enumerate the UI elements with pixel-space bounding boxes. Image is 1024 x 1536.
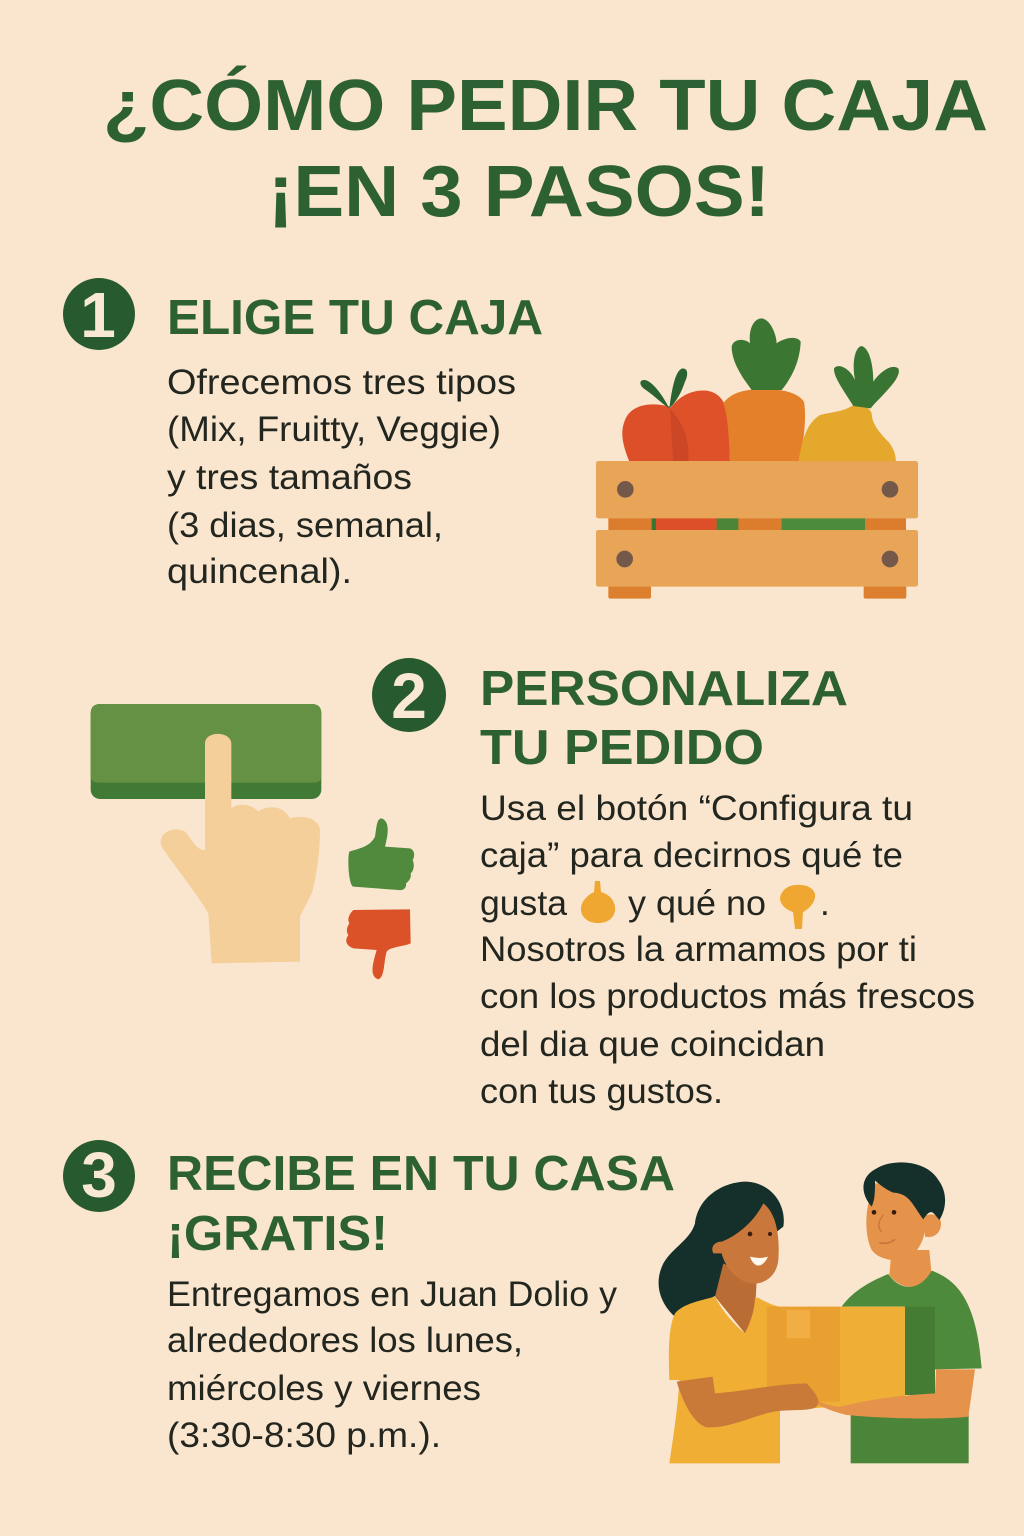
step 2 text: con los productos más frescos: [480, 977, 975, 1016]
step 3 number badge: [63, 1139, 135, 1212]
step 2 text: caja” para decirnos qué te: [480, 836, 903, 875]
icon: red thumb down: [346, 909, 411, 979]
step 1 text: (Mix, Fruitty, Veggie): [167, 410, 501, 449]
step 2 text: y qué no: [628, 884, 766, 923]
step 1 number badge: [63, 278, 135, 351]
title: ¡EN 3 PASOS!: [268, 152, 770, 232]
step 1 heading: ELIGE TU CAJA: [167, 291, 543, 345]
step 3 text: alrededores los lunes,: [167, 1321, 523, 1360]
step 2 text: con tus gustos.: [480, 1072, 723, 1111]
step 3 text: (3:30-8:30 p.m.).: [167, 1416, 441, 1455]
step 2 text: del dia que coincidan: [480, 1025, 825, 1064]
step 1 text: (3 dias, semanal,: [167, 506, 443, 545]
woman: [659, 1182, 840, 1463]
step 3 text: miércoles y viernes: [167, 1369, 481, 1408]
step 3 text: Entregamos en Juan Dolio y: [167, 1275, 618, 1314]
step 3 heading: [167, 1147, 675, 1261]
step 3 heading: RECIBE EN TU CASA: [167, 1147, 675, 1201]
icon: crate of vegetables: [596, 318, 918, 599]
step 2 heading: TU PEDIDO: [480, 721, 764, 775]
icon: hand pressing button: [91, 704, 321, 963]
cardboard box: [767, 1307, 905, 1407]
man: [842, 1162, 982, 1463]
step 2 heading: PERSONALIZA: [480, 662, 848, 716]
title: ¿CÓMO PEDIR TU CAJA: [103, 65, 988, 146]
step 1 text: quincenal).: [167, 552, 352, 591]
step 2 text: Nosotros la armamos por ti: [480, 930, 917, 969]
step 2 heading: [480, 662, 848, 775]
title: [103, 65, 988, 232]
step 2 number badge: [372, 658, 446, 732]
step 3 heading: ¡GRATIS!: [167, 1207, 388, 1261]
step 1 number badge: 1: [80, 279, 116, 351]
step 1 text: Ofrecemos tres tipos: [167, 363, 516, 402]
step 2 text: Usa el botón “Configura tu: [480, 789, 913, 828]
arms: [677, 1369, 975, 1427]
icon: green thumb up: [348, 818, 414, 890]
step 3 number badge: 3: [81, 1139, 117, 1211]
step 3 text: [167, 1275, 618, 1455]
illustration: delivery couple with box: [659, 1162, 982, 1463]
step 2 text: [480, 789, 975, 1111]
step 2 number badge: 2: [391, 660, 427, 732]
step 2 text: gusta: [480, 884, 568, 923]
step 1 text: [167, 363, 516, 591]
step 1 text: y tres tamaños: [167, 458, 412, 497]
step 2 text: .: [820, 884, 830, 923]
